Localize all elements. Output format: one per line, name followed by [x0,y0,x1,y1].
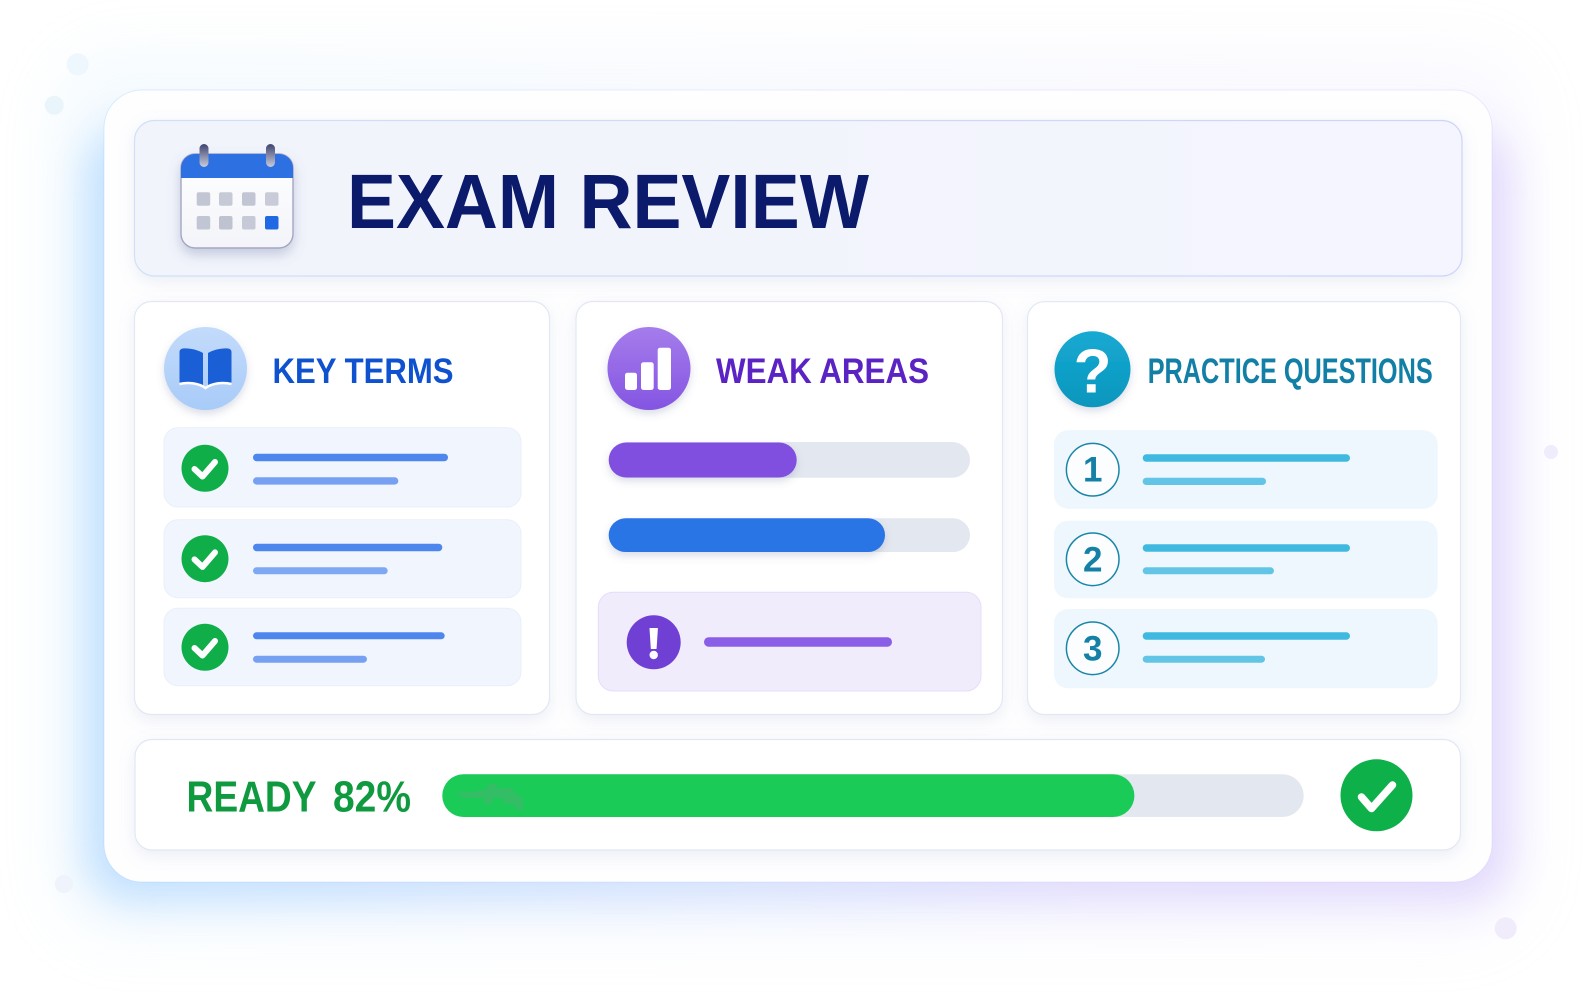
icon: calendar [181,144,293,248]
title: EXAM REVIEW [347,159,869,245]
decorative dot: bottom right [1495,917,1517,939]
panel: readiness [135,740,1460,850]
item: question 3 [1054,609,1438,688]
heading: key terms: KEY TERMS [272,352,454,391]
item: key term 3 [164,608,521,686]
callout: warning [598,592,981,691]
decorative dot: top left large [67,53,89,75]
heading: weak areas: WEAK AREAS [716,352,929,391]
bar: purple progress [609,442,970,478]
item: key term 1 [164,428,521,507]
decorative dot: top left small [45,96,64,115]
heading: practice questions: PRACTICE QUESTIONS [1148,352,1433,391]
item: question 2 [1054,521,1438,598]
readiness label: READY [186,774,316,822]
icon: question mark: ? [1074,337,1111,406]
bar: blue progress [609,518,970,552]
item: question 1: 1 [1083,451,1102,490]
item: question 2: 2 [1083,541,1102,580]
readiness label: 82% [333,774,411,822]
item: key term 2 [164,520,521,598]
item: question 3: 3 [1083,630,1102,669]
header panel [134,120,1462,276]
item: question 1 [1054,430,1438,509]
icon: question mark [1054,331,1130,407]
panel: key terms [134,302,550,714]
panel: weak areas [576,302,1002,714]
icon: ready check [1340,759,1412,831]
panel: practice questions [1028,302,1460,714]
progress bar: ready [442,774,1304,817]
main card [104,90,1492,882]
icon: open book [164,327,247,410]
decorative dot: right [1544,445,1558,459]
decorative dot: bottom left [55,875,73,893]
icon: bar chart [608,327,690,410]
